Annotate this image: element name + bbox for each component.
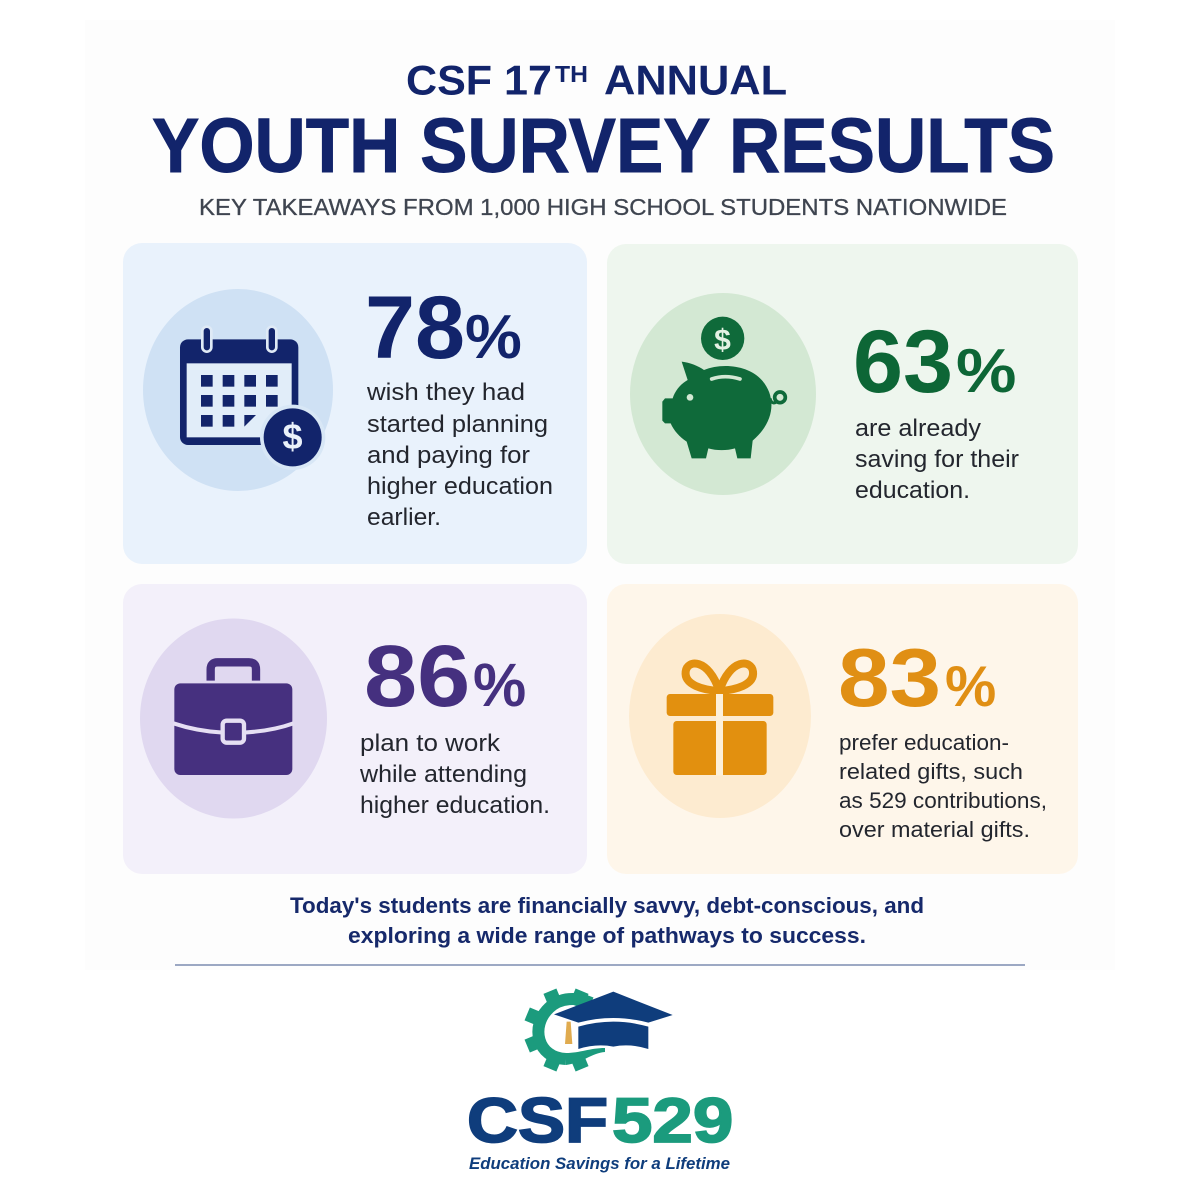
heading: CSF 17th Annual: ANNUAL — [604, 57, 787, 103]
icon: piggy bank with coin: $ — [714, 324, 731, 357]
statistic: 86% — [364, 628, 526, 725]
wordmark: CSF — [467, 1085, 608, 1156]
heading: Youth Survey Results: YOUTH SURVEY RESULTS — [152, 102, 1055, 189]
icon: calendar with dollar coin: $ — [282, 416, 303, 457]
icon: piggy bank with coin — [630, 293, 816, 495]
statistic: 78%: 78 — [365, 277, 465, 377]
icon: gift box — [629, 614, 811, 818]
description text: prefer education- — [839, 730, 1009, 755]
panel: 83 percent gifts — [607, 584, 1078, 874]
description text: started planning — [367, 411, 548, 438]
description text: earlier. — [367, 504, 441, 531]
description text: over material gifts. — [839, 817, 1030, 842]
description text — [359, 730, 550, 819]
statistic: 63%: 63 — [853, 311, 953, 411]
closing statement: exploring a wide range of pathways to success. — [348, 923, 866, 948]
title block — [152, 57, 1055, 220]
statistic: 83%: % — [945, 655, 996, 719]
statistic: 86%: 86 — [364, 628, 470, 725]
wordmark — [467, 1085, 733, 1156]
description text: saving for their — [855, 446, 1019, 473]
statistic: 63%: % — [956, 336, 1016, 405]
description text: are already — [855, 415, 981, 442]
description text: higher education. — [360, 792, 550, 819]
statistic: 63% — [853, 311, 1016, 411]
description text: while attending — [359, 761, 527, 788]
statistic: 78% — [365, 277, 522, 377]
tagline: Education Savings for a Lifetime — [469, 1155, 730, 1173]
description text — [855, 415, 1019, 504]
icon: briefcase — [140, 618, 327, 818]
subtitle: KEY TAKEAWAYS FROM 1,000 HIGH SCHOOL STUDENTS NATIONWIDE — [199, 194, 1007, 220]
heading: CSF 17th Annual — [406, 57, 787, 103]
description text: and paying for — [367, 442, 530, 469]
logo: CSF529 — [467, 989, 733, 1173]
panel: 63 percent saving — [607, 244, 1078, 564]
heading: CSF 17th Annual: CSF 17 — [406, 57, 552, 103]
wordmark: 529 — [612, 1085, 733, 1156]
closing statement: Today's students are financially savvy, debt-conscious, and — [290, 893, 924, 918]
description text: education. — [855, 477, 970, 504]
panel: 78 percent planning — [123, 243, 587, 564]
description text: plan to work — [360, 730, 501, 757]
statistic: 83%: 83 — [838, 631, 941, 724]
description text: wish they had — [366, 379, 525, 406]
description text: as 529 contributions, — [839, 788, 1047, 813]
statistic: 83% — [838, 631, 996, 724]
statistic: 78%: % — [465, 303, 522, 372]
description text: higher education — [367, 473, 553, 500]
description text — [839, 730, 1047, 842]
icon: calendar with dollar coin — [143, 289, 333, 491]
panel: 86 percent working — [123, 584, 587, 874]
icon: gear with graduation cap — [525, 989, 673, 1071]
description text — [366, 379, 553, 531]
closing statement — [290, 893, 924, 948]
statistic: 86%: % — [473, 650, 526, 719]
description text: related gifts, such — [839, 759, 1023, 784]
heading: CSF 17th Annual: TH — [555, 62, 588, 88]
